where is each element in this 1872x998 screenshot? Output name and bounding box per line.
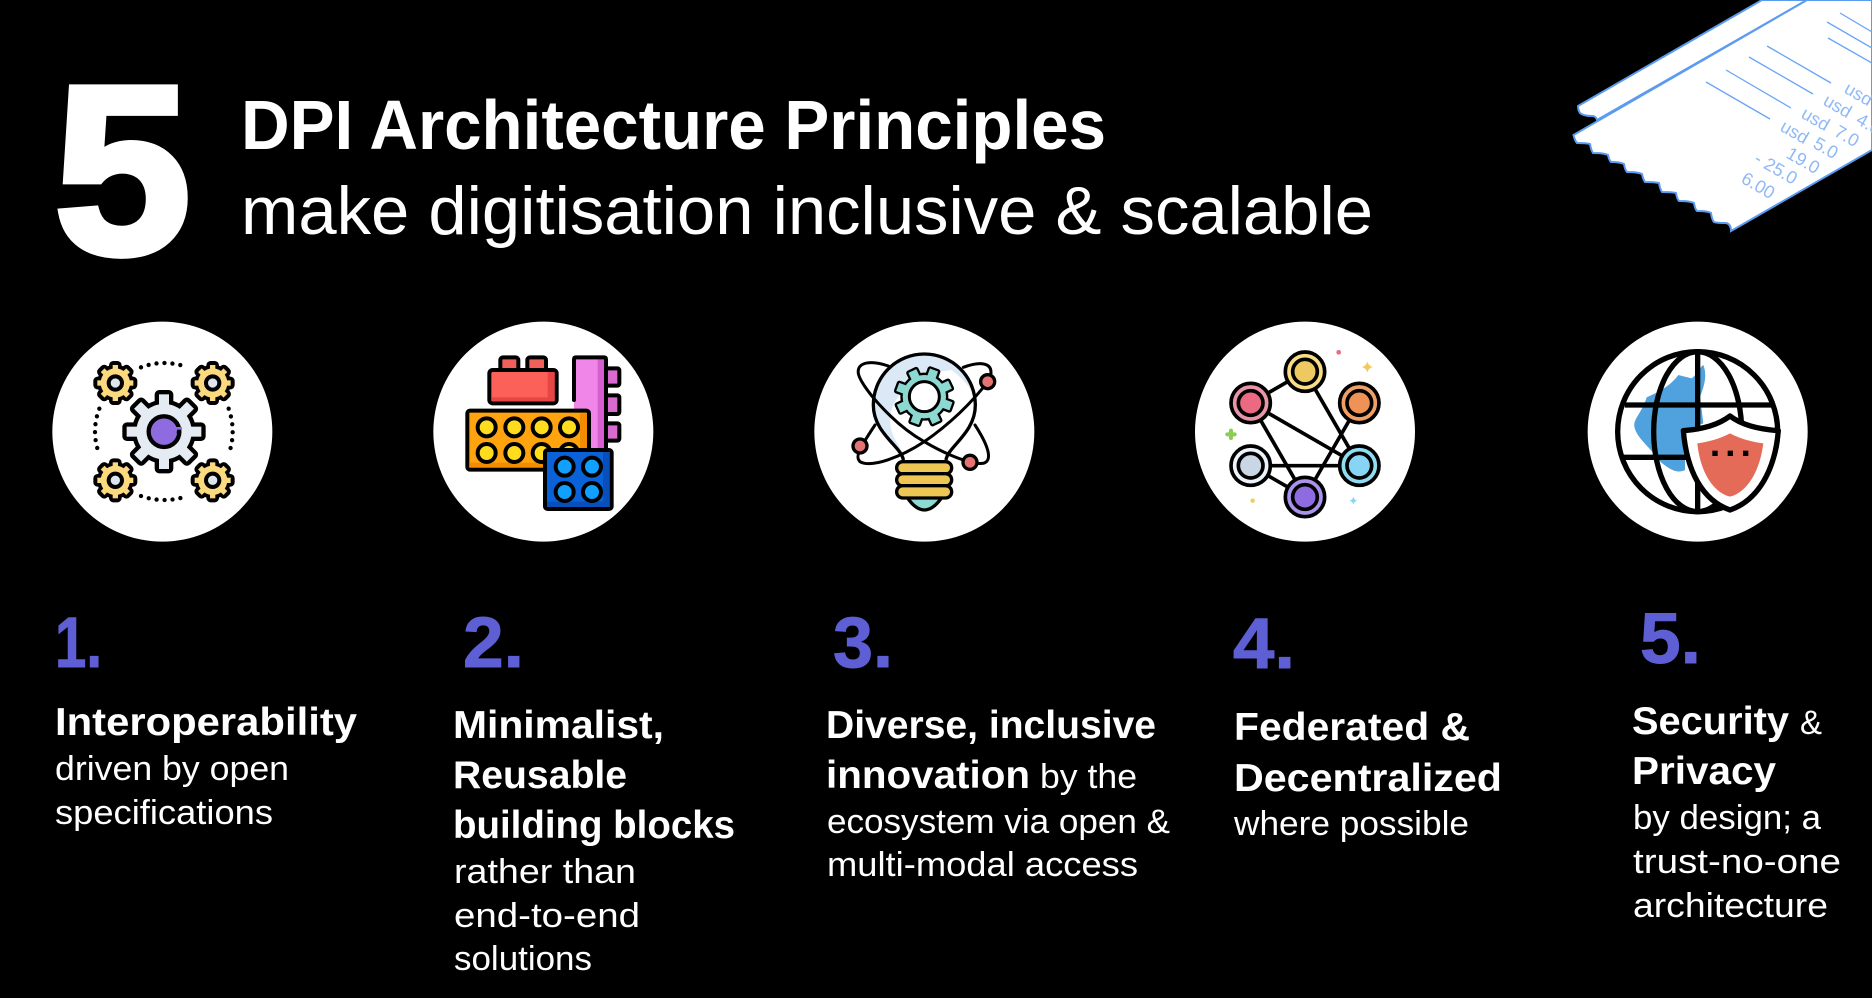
icon: network of nodes	[1195, 322, 1415, 542]
principle 2 text: solutions	[454, 940, 592, 978]
principle 4 text: where possible	[1233, 805, 1469, 843]
title	[241, 86, 1373, 249]
title: DPI Architecture Principles	[241, 86, 1106, 164]
principle 4 text: Decentralized	[1234, 757, 1502, 800]
receipt illustration: 7.0	[1831, 121, 1863, 151]
principle 3 text: Diverse, inclusive	[826, 704, 1156, 747]
principle 5 text: trust-no-one	[1633, 843, 1841, 881]
receipt illustration: usd	[1820, 90, 1855, 122]
receipt illustration: 5.0	[1810, 133, 1842, 163]
principle 3 text	[826, 604, 1170, 884]
principle 3 text: by the	[1040, 758, 1137, 796]
principle 5 text: architecture	[1633, 887, 1828, 925]
principle 2 text: building blocks	[453, 804, 735, 847]
principle 3 text: 3.	[833, 604, 893, 683]
principle 2 text: rather than	[454, 853, 636, 891]
icon: building blocks	[433, 322, 653, 542]
principle 5 text	[1632, 600, 1841, 925]
principle 1 text: driven by open	[55, 750, 289, 788]
receipt illustration	[1574, 0, 1872, 231]
receipt illustration: 6.00	[1738, 168, 1778, 203]
icon: light bulb with gear and orbits	[814, 322, 1034, 542]
receipt illustration: - 25.0	[1751, 148, 1801, 188]
principle 5 text: by design; a	[1633, 799, 1821, 837]
principle 4 text: Federated &	[1234, 706, 1470, 749]
title: make digitisation inclusive & scalable	[241, 173, 1373, 249]
principle 4 text: 4.	[1233, 605, 1295, 684]
receipt illustration: 19.0	[1783, 143, 1823, 178]
principle 3 text: innovation	[826, 754, 1030, 797]
receipt illustration: usd	[1777, 116, 1812, 148]
principle 3 text: ecosystem via open &	[827, 803, 1170, 841]
big number 5: 5	[54, 36, 191, 304]
principle 2 text: end-to-end	[454, 897, 640, 935]
principle 5 text: Security	[1632, 700, 1789, 743]
principle 3 text: multi-modal access	[827, 846, 1138, 884]
principle 5 text: &	[1800, 704, 1822, 742]
principle 1 text	[55, 604, 357, 832]
receipt illustration: usd	[1798, 103, 1833, 135]
principle 2 text	[453, 604, 735, 978]
principle 2 text: Minimalist,	[453, 704, 664, 747]
principle 1 text: 1.	[55, 604, 102, 683]
icon: gears	[52, 322, 272, 542]
principle 4 text	[1233, 605, 1502, 843]
principle 1 text: specifications	[55, 794, 273, 832]
icon: globe with shield	[1588, 322, 1808, 542]
principle 5 text: Privacy	[1632, 750, 1776, 793]
principle 1 text: Interoperability	[55, 701, 357, 744]
principle 2 text: Reusable	[453, 754, 627, 797]
principle 5 text: 5.	[1640, 600, 1701, 679]
principle 2 text: 2.	[463, 604, 524, 683]
